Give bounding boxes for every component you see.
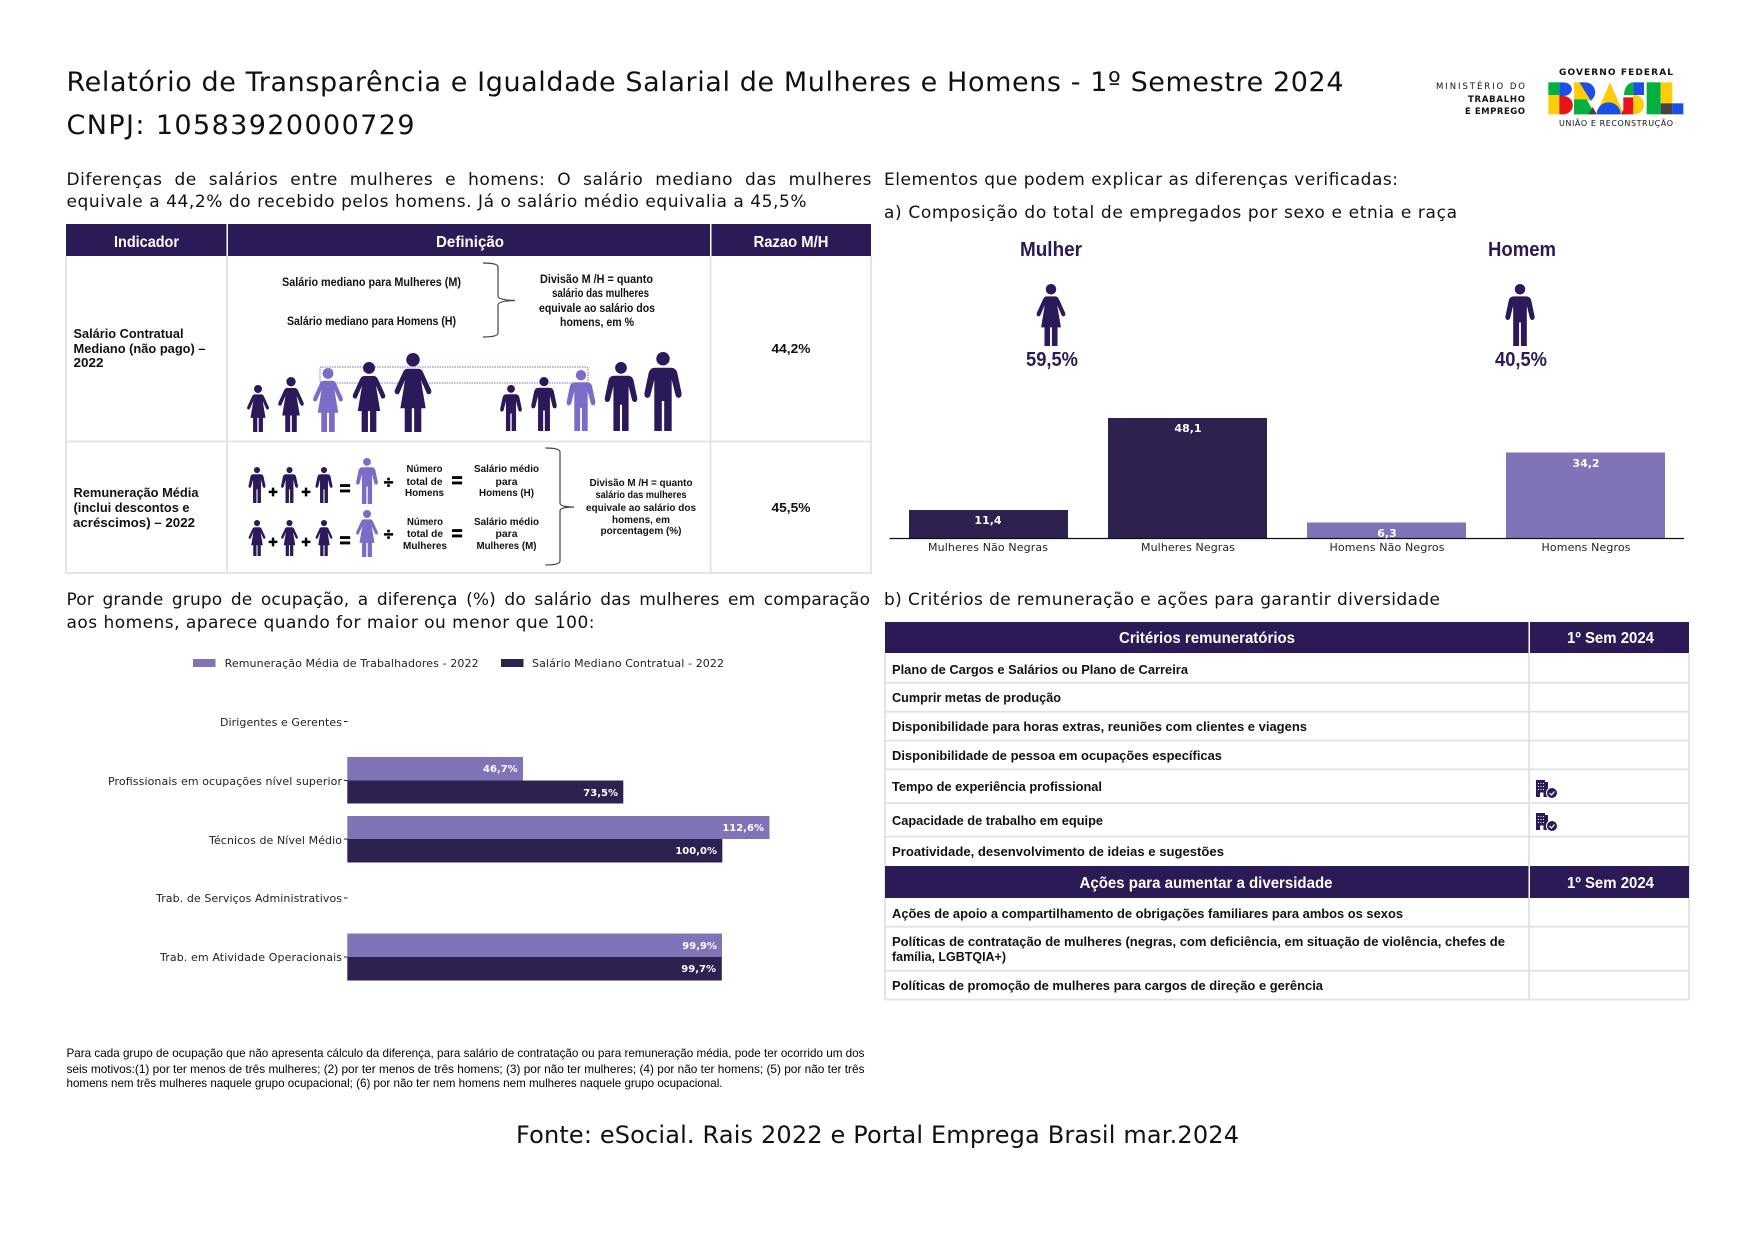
indicador text: Salário Contratual	[74, 327, 184, 341]
bar chart: composição por sexo e raça: Mulheres Negras	[1141, 541, 1235, 554]
category labels: Trab. de Serviços Administrativos	[155, 892, 342, 905]
formula: homens: Número	[406, 463, 442, 475]
indicador text: acréscimos) – 2022	[73, 516, 195, 530]
formula: mulheres: +	[268, 534, 278, 551]
table header: Definição	[436, 234, 504, 251]
bars: operacionais: 99,9%	[682, 941, 717, 952]
text: divisão M/H: homens, em %	[560, 317, 634, 329]
formula: homens: =	[339, 479, 351, 500]
labels: salário mediano: Salário mediano para Homens (H)	[287, 316, 456, 328]
table header: Indicador	[114, 234, 179, 251]
title: CNPJ: 10583920000729	[66, 110, 414, 141]
bar chart: composição por sexo e raça: 34,2	[1572, 457, 1600, 470]
legend	[193, 657, 724, 670]
table header: Razao M/H	[754, 234, 828, 251]
text: divisão M/H	[539, 274, 655, 329]
rows: critérios: Capacidade de trabalho em equipe	[892, 814, 1103, 828]
rows: ações: Políticas de promoção de mulheres para cargos de direção e gerência	[892, 979, 1324, 993]
bars: técnicos	[347, 816, 770, 862]
text: divisão M/H: Divisão M /H = quanto	[540, 274, 653, 286]
value: 59,5%: 59,5%	[1026, 349, 1078, 371]
brace	[546, 448, 574, 565]
icon: empresa com check	[1536, 813, 1558, 832]
bar chart: composição por sexo e raça: Mulheres Não Negras	[928, 541, 1048, 554]
chart: barras por grupo de ocupação	[108, 657, 770, 980]
rows: ações	[892, 907, 1505, 993]
formula: homens: +	[268, 484, 278, 501]
footnote: homens nem três mulheres naquele grupo ocupacional; (6) por não ter nem homens nem mulheres naquele grupo ocupacional.	[66, 1076, 722, 1090]
heading: critérios: b) Critérios de remuneração e ações para garantir diversidade	[884, 590, 1440, 610]
rows: critérios: Plano de Cargos e Salários ou Plano de Carreira	[892, 663, 1189, 677]
bars: profissionais: 46,7%	[483, 764, 518, 775]
indicador text	[74, 327, 206, 370]
bars: técnicos: 100,0%	[675, 846, 717, 857]
icon: empresa com check	[1536, 780, 1558, 798]
formula: homens: total de	[406, 476, 443, 488]
text: ministério: MINISTÉRIO DO	[1436, 80, 1525, 92]
indicador text	[73, 486, 200, 530]
logo shapes: Brasil	[1548, 82, 1683, 114]
rows: critérios: Proatividade, desenvolvimento de ideias e sugestões	[892, 845, 1224, 859]
formula: mulheres: +	[301, 534, 311, 551]
icons: mulheres	[247, 353, 431, 432]
labels: salário mediano	[282, 277, 461, 328]
brace	[483, 263, 515, 337]
text: divisão M/H: salário das mulheres	[596, 489, 687, 501]
icon: homem	[1505, 284, 1535, 346]
logo: ministério e governo federal	[1436, 68, 1683, 128]
panel: mulher	[1020, 239, 1082, 371]
bar chart: composição por sexo e raça: Homens Negros	[1542, 541, 1631, 554]
panel: tabela indicador definição razão	[66, 224, 871, 573]
formula: mulheres: total de	[407, 528, 443, 540]
footnote: Para cada grupo de ocupação que não apresenta cálculo da diferença, para salário de contratação ou para remuneração média, pode ter ocorrido um dos	[66, 1046, 864, 1060]
bar chart: composição por sexo e raça	[890, 418, 1684, 554]
rows: ações: Ações de apoio a compartilhamento de obrigações familiares para ambos os sexos	[892, 907, 1403, 921]
formula: homens: =	[451, 471, 463, 492]
icon: mulher	[1037, 284, 1065, 346]
formula: homens: para	[496, 476, 518, 488]
formula: homens: Homens	[405, 487, 444, 499]
text: divisão M/H: salário das mulheres	[552, 288, 649, 300]
header: critérios remuneratórios: 1º Sem 2024	[1567, 630, 1654, 647]
formula: mulheres: Mulheres (M)	[476, 540, 536, 552]
formula: homens	[249, 458, 539, 504]
text: divisão M/H: porcentagem (%)	[600, 525, 682, 537]
intro text: diferenças de salários	[66, 170, 872, 212]
rows: critérios: Cumprir metas de produção	[892, 691, 1061, 705]
bar chart: composição por sexo e raça: 11,4	[974, 514, 1002, 527]
rows: ações: Políticas de contratação de mulheres (negras, com deficiência, em situação de violência, chefes de	[892, 935, 1505, 949]
formula: homens: ÷	[384, 473, 393, 492]
legend: Remuneração Média de Trabalhadores - 2022	[225, 657, 479, 670]
bar chart: composição por sexo e raça: 48,1	[1174, 422, 1202, 435]
header: ações para aumentar a diversidade: 1º Sem 2024	[1567, 875, 1654, 892]
value: 44,2%: 44,2%	[772, 342, 810, 356]
heading: por grande grupo de ocupação	[66, 590, 870, 633]
bars: operacionais	[347, 934, 722, 980]
dotted mediana box	[320, 367, 588, 383]
value: 40,5%: 40,5%	[1495, 349, 1547, 371]
category labels: Trab. em Atividade Operacionais	[159, 951, 342, 964]
formula: mulheres: =	[339, 531, 351, 552]
bars: profissionais	[347, 757, 623, 804]
heading: por grande grupo de ocupação: aos homens, aparece quando for maior ou menor que 100:	[66, 613, 594, 633]
rows: critérios: Tempo de experiência profissional	[892, 780, 1102, 794]
heading: mulher: Mulher	[1020, 239, 1082, 261]
title: Relatório de Transparência e Igualdade Salarial de Mulheres e Homens - 1º Semestre 2024	[66, 67, 1344, 98]
text: ministério	[1436, 80, 1525, 117]
row: remuneração média	[73, 448, 810, 565]
text: divisão M/H: equivale ao salário dos	[586, 502, 696, 514]
footnote: seis motivos:(1) por ter menos de três mulheres; (2) por ter menos de três homens; (3) por não ter mulheres; (4) por não ter homens; (5) por não ter três	[66, 1062, 864, 1076]
indicador text: Remuneração Média	[74, 486, 200, 500]
formula: mulheres: Mulheres	[403, 540, 447, 552]
row: salário contratual mediano	[74, 263, 810, 432]
bar chart: composição por sexo e raça: Homens Não Negros	[1330, 541, 1445, 554]
text: união e reconstrução: UNIÃO E RECONSTRUÇÃO	[1559, 118, 1673, 128]
legend: Salário Mediano Contratual - 2022	[532, 657, 724, 670]
formula: mulheres: Número	[407, 516, 443, 528]
formula: homens: Homens (H)	[479, 487, 534, 499]
intro text: diferenças de salários: equivale a 44,2% do recebido pelos homens. Já o salário médio equivalia a 45,5%	[66, 192, 807, 212]
header: ações para aumentar a diversidade	[885, 866, 1689, 898]
text: divisão M/H	[586, 477, 696, 537]
category labels	[108, 716, 342, 964]
category labels: Dirigentes e Gerentes	[220, 716, 342, 729]
panel: homem	[1488, 239, 1556, 371]
labels: salário mediano: Salário mediano para Mulheres (M)	[282, 277, 461, 289]
heading: elementos que podem explicar: Elementos que podem explicar as diferenças verificadas:	[884, 170, 1398, 190]
icons: homens	[500, 352, 682, 431]
formula: mulheres: ÷	[384, 525, 393, 544]
footnote	[66, 1046, 864, 1090]
heading: homem: Homem	[1488, 239, 1556, 261]
rows: ações: família, LGBTQIA+)	[892, 950, 1006, 964]
category labels: Profissionais em ocupações nível superior	[108, 775, 342, 788]
heading: por grande grupo de ocupação: Por grande grupo de ocupação, a diferença (%) do salário das mulheres em comparação	[66, 590, 870, 610]
intro text: diferenças de salários: Diferenças de salários entre mulheres e homens: O salário mediano das mulheres	[66, 170, 872, 190]
formula: mulheres: =	[451, 524, 463, 545]
header: ações para aumentar a diversidade: Ações para aumentar a diversidade	[1080, 875, 1333, 892]
formula: mulheres	[249, 510, 539, 557]
formula: homens: Salário médio	[474, 463, 539, 475]
formula: mulheres: para	[496, 528, 518, 540]
text: divisão M/H: equivale ao salário dos	[539, 303, 655, 315]
formula: homens: +	[301, 484, 311, 501]
header: critérios remuneratórios: Critérios remuneratórios	[1119, 630, 1295, 647]
indicador text: (inclui descontos e	[74, 501, 190, 515]
text: ministério: E EMPREGO	[1465, 107, 1525, 117]
text: divisão M/H: Divisão M /H = quanto	[590, 477, 692, 489]
text: governo federal: GOVERNO FEDERAL	[1559, 68, 1673, 78]
bars: profissionais: 73,5%	[583, 788, 618, 799]
bars: operacionais: 99,7%	[681, 964, 716, 975]
rows: critérios: Disponibilidade para horas extras, reuniões com clientes e viagens	[892, 720, 1307, 734]
header: critérios remuneratórios	[885, 622, 1689, 653]
title	[66, 67, 1344, 141]
indicador text: 2022	[74, 356, 104, 370]
bar chart: composição por sexo e raça: 6,3	[1377, 527, 1397, 540]
bars: técnicos: 112,6%	[722, 823, 764, 834]
rows: critérios	[892, 663, 1307, 859]
text: divisão M/H: homens, em	[612, 514, 670, 526]
value: 45,5%: 45,5%	[772, 501, 810, 515]
rows: critérios: Disponibilidade de pessoa em ocupações específicas	[892, 749, 1222, 763]
panel: tabela critérios e ações	[885, 622, 1689, 1000]
formula: mulheres: Salário médio	[474, 516, 539, 528]
category labels: Técnicos de Nível Médio	[208, 834, 342, 847]
indicador text: Mediano (não pago) –	[74, 342, 206, 356]
table header	[66, 224, 871, 256]
text: ministério: TRABALHO	[1468, 95, 1525, 105]
source line: Fonte: eSocial. Rais 2022 e Portal Emprega Brasil mar.2024	[516, 1121, 1239, 1149]
heading: composição: a) Composição do total de empregados por sexo e etnia e raça	[884, 203, 1457, 223]
